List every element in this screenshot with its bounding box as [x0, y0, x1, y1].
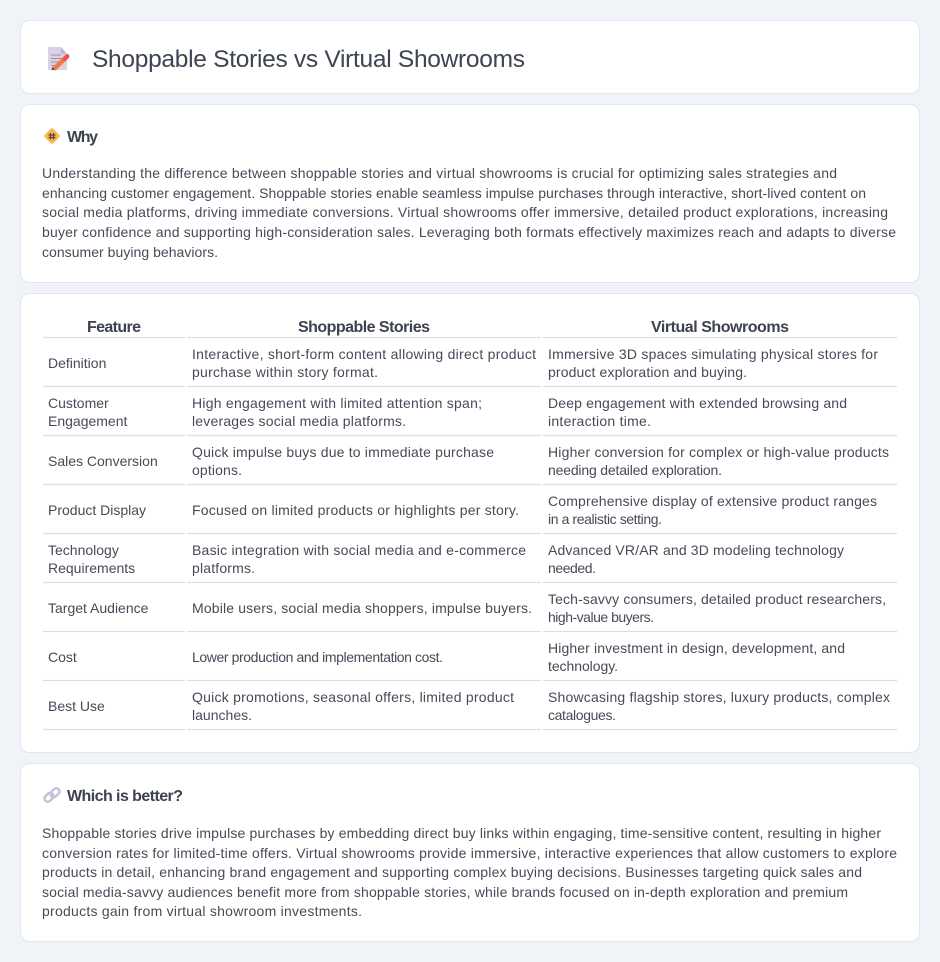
text block: why: social media platforms, driving immediate conversions. Virtual showrooms offer immersive, detailed product explorations, increasing	[42, 204, 888, 220]
row: best use: Best Use	[48, 698, 105, 714]
table header	[87, 319, 789, 336]
row: technology requirements	[48, 542, 844, 576]
row: cost: Cost	[48, 649, 77, 665]
row: sales conversion: Quick impulse buys due to immediate purchase	[192, 444, 494, 460]
row: product display: Focused on limited products or highlights per story.	[192, 502, 519, 518]
row: technology requirements: Technology	[48, 542, 119, 558]
row: definition	[48, 346, 878, 380]
panel: why	[20, 104, 920, 282]
title: Shoppable Stories vs Virtual Showrooms	[92, 46, 525, 73]
row: cost: Higher investment in design, development, and	[548, 640, 845, 656]
row: cost: technology.	[548, 658, 618, 674]
heading: why: Why	[67, 129, 98, 146]
row: customer engagement: Deep engagement with extended browsing and	[548, 395, 847, 411]
row: technology requirements: platforms.	[192, 560, 255, 576]
row: target audience	[48, 591, 886, 625]
icon: diamond sign	[44, 128, 60, 144]
row: product display	[48, 493, 877, 527]
row: definition: purchase within story format.	[192, 364, 378, 380]
row: definition: product exploration and buying.	[548, 364, 747, 380]
row: target audience: Mobile users, social media shoppers, impulse buyers.	[192, 600, 532, 616]
row: definition: Immersive 3D spaces simulating physical stores for	[548, 346, 878, 362]
table header: Virtual Showrooms	[651, 319, 789, 336]
text block: which is better: products in detail, enhancing brand engagement and supporting complex buying decisions. Businesses targeting quick sales and	[42, 864, 862, 880]
table header: Feature	[87, 319, 141, 336]
icon: link	[43, 787, 61, 803]
row: sales conversion: Sales Conversion	[48, 453, 158, 469]
row: best use: Quick promotions, seasonal offers, limited product	[192, 689, 514, 705]
panel: which is better	[20, 764, 920, 942]
row: definition: Definition	[48, 355, 106, 371]
row: target audience: Target Audience	[48, 600, 149, 616]
row: product display: in a realistic setting.	[548, 511, 662, 527]
text block: which is better: products gain from virtual showroom investments.	[42, 903, 362, 919]
row: product display: Product Display	[48, 502, 146, 518]
row: target audience: Tech-savvy consumers, detailed product researchers,	[548, 591, 886, 607]
row: customer engagement	[48, 395, 847, 429]
text block: why: buyer confidence and supporting high-consideration sales. Leveraging both formats effectively maximizes reach and adapts to diverse	[42, 224, 896, 240]
table header: Shoppable Stories	[298, 319, 430, 336]
text block: which is better: conversion rates for limited-time offers. Virtual showrooms provide immersive, interactive experiences that allow customers to explore	[42, 845, 897, 861]
row: sales conversion: options.	[192, 462, 242, 478]
row: definition: Interactive, short-form content allowing direct product	[192, 346, 536, 362]
row: customer engagement: leverages social media platforms.	[192, 413, 406, 429]
row: customer engagement: interaction time.	[548, 413, 651, 429]
row: cost: Lower production and implementation cost.	[192, 649, 443, 665]
row: best use	[48, 689, 890, 723]
row: technology requirements: Advanced VR/AR and 3D modeling technology	[548, 542, 844, 558]
heading: which is better: Which is better?	[67, 788, 183, 805]
row: technology requirements: needed.	[548, 560, 596, 576]
text block: which is better: Shoppable stories drive impulse purchases by embedding direct buy links within engaging, time-sensitive content, resulting in higher	[42, 825, 881, 841]
row: sales conversion: Higher conversion for complex or high-value products	[548, 444, 889, 460]
row: target audience: high-value buyers.	[548, 609, 654, 625]
row: customer engagement: Engagement	[48, 413, 128, 429]
row: technology requirements: Basic integration with social media and e-commerce	[192, 542, 526, 558]
row: product display: Comprehensive display of extensive product ranges	[548, 493, 877, 509]
row: sales conversion	[48, 444, 889, 478]
text block: why: consumer buying behaviors.	[42, 244, 218, 260]
row: sales conversion: needing detailed exploration.	[548, 462, 722, 478]
text block: why: enhancing customer engagement. Shoppable stories enable seamless impulse purchases through interactive, short-lived content on	[42, 185, 866, 201]
row: cost	[48, 640, 845, 674]
row: best use: launches.	[192, 707, 252, 723]
row: best use: Showcasing flagship stores, luxury products, complex	[548, 689, 890, 705]
text block: which is better: social media-savvy audiences benefit more from shoppable stories, while brands focused on in-depth exploration and premium	[42, 884, 848, 900]
text block: why: Understanding the difference between shoppable stories and virtual showrooms is crucial for optimizing sales strategies and	[42, 165, 837, 181]
row: customer engagement: High engagement with limited attention span;	[192, 395, 482, 411]
row: technology requirements: Requirements	[48, 560, 135, 576]
text block: which is better	[42, 825, 897, 919]
panel: header	[20, 20, 920, 94]
text block: why	[42, 165, 896, 260]
icon: memo with pencil	[48, 47, 67, 70]
panel: comparison table	[20, 294, 920, 752]
row: customer engagement: Customer	[48, 395, 109, 411]
row: best use: catalogues.	[548, 707, 616, 723]
